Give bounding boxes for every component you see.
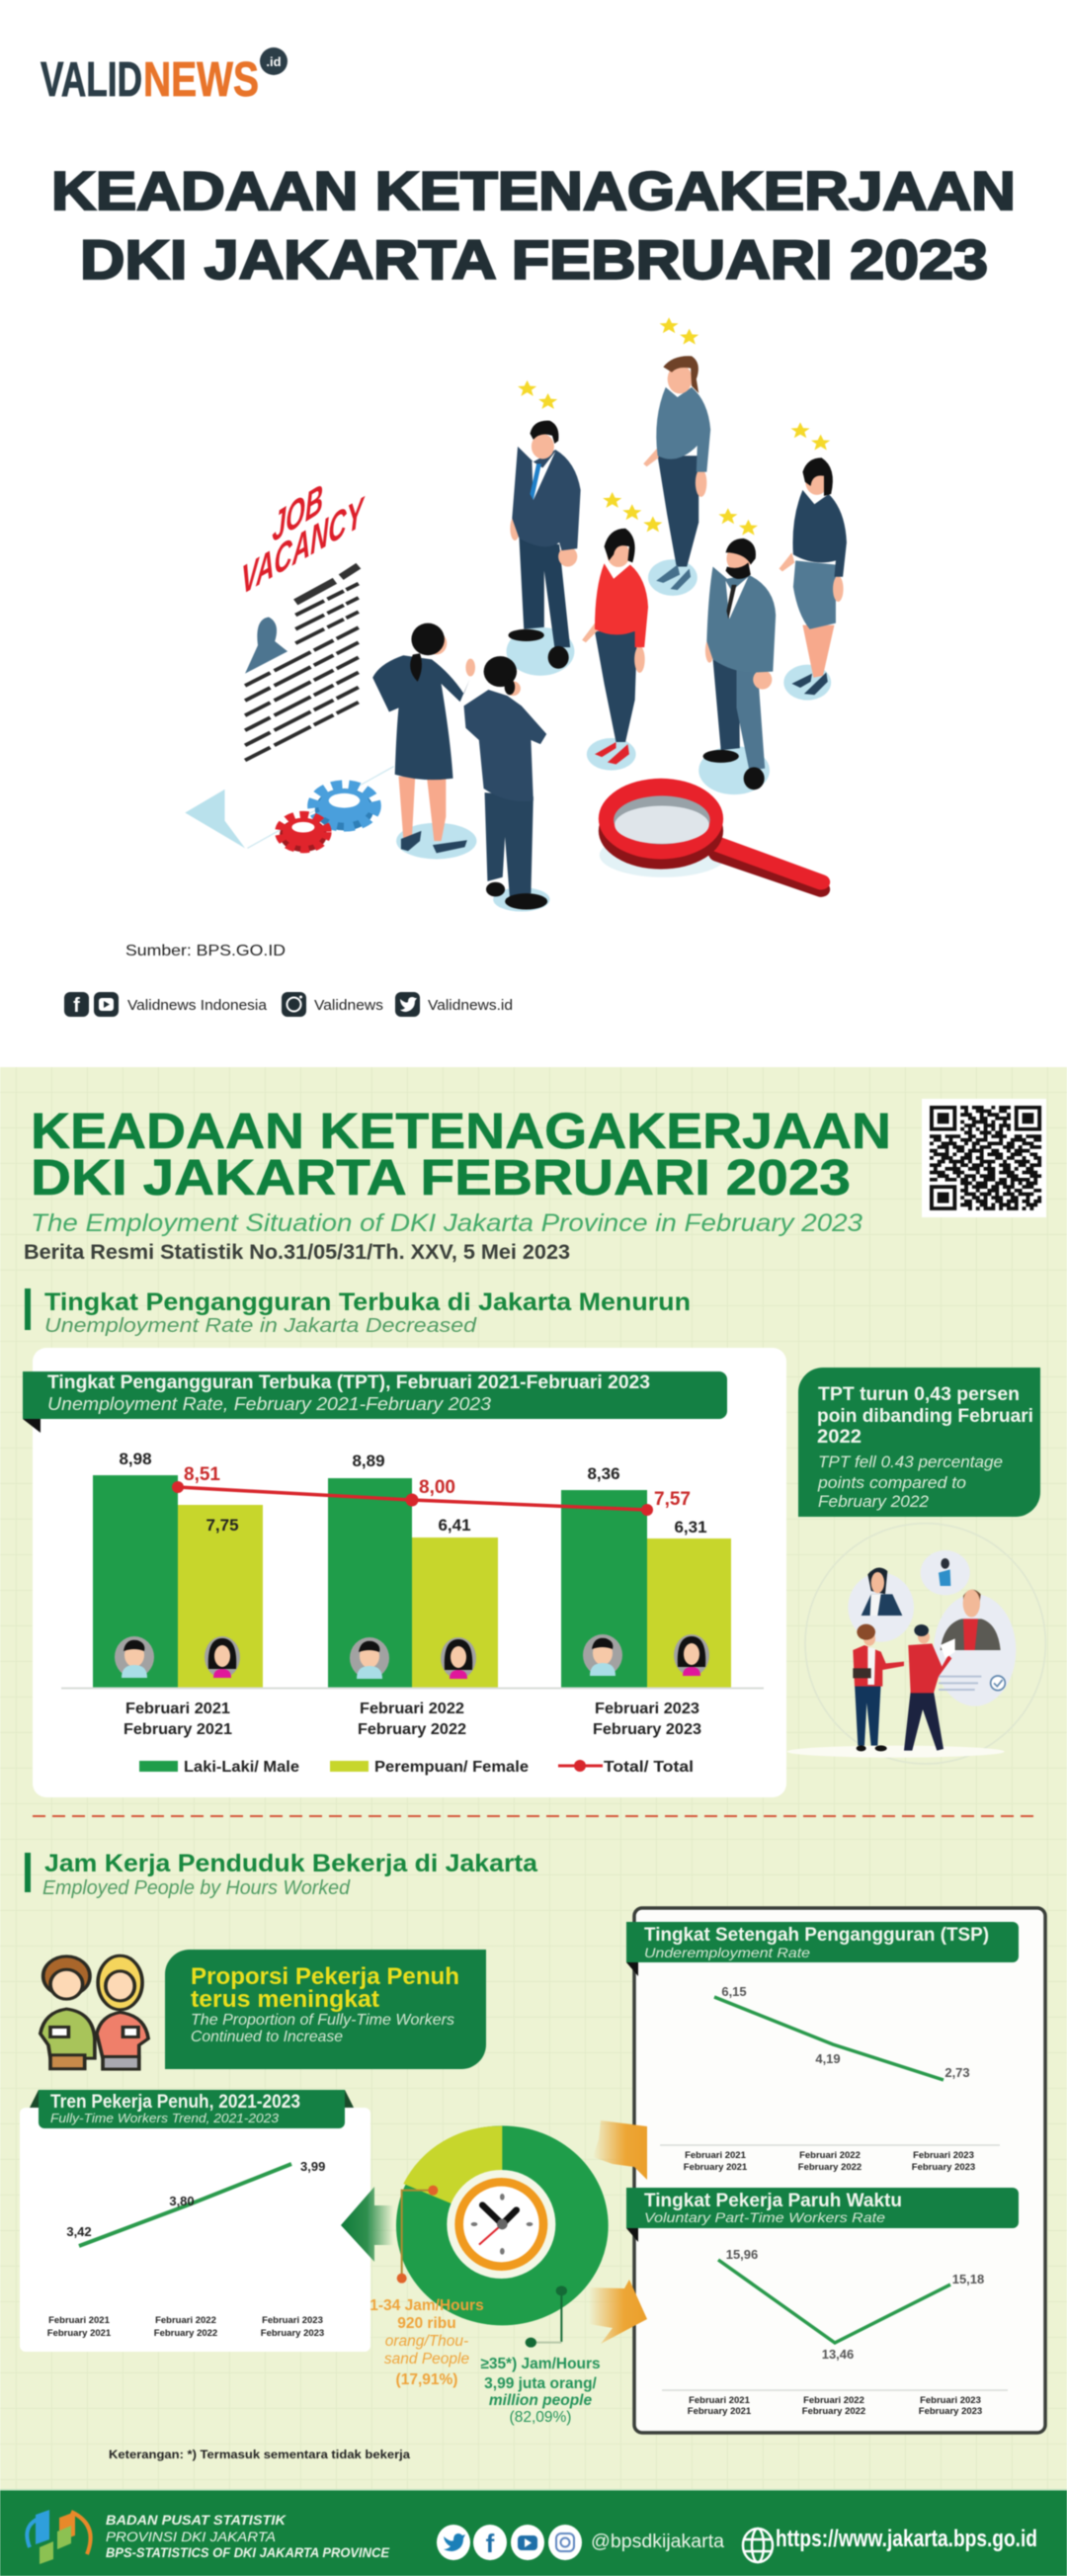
x axis labels: Februari 2021 xyxy=(48,2315,111,2326)
icon: QR code xyxy=(922,1099,1046,1217)
line chart: full-time workers xyxy=(66,2159,325,2246)
callout: TPT decrease: poin dibanding Februari xyxy=(817,1406,1033,1427)
leader: 35 hours and above xyxy=(526,2285,567,2348)
page background: white xyxy=(0,0,1067,1067)
label: 35 hours and above: (82,09%) xyxy=(510,2409,571,2426)
callout: proportion of full-time workers: The Proportion of Fully-Time Workers xyxy=(191,2012,454,2029)
callout: proportion of full-time workers: Continued to Increase xyxy=(191,2029,343,2045)
person: woman in navy dress xyxy=(372,623,476,859)
line chart: underemployment: February 2022 xyxy=(798,2162,862,2173)
person: woman in red jacket xyxy=(853,1624,904,1751)
x axis labels: Februari 2021 xyxy=(125,1701,230,1717)
bar value labels xyxy=(119,1450,707,1537)
x axis labels: Februari 2023 xyxy=(595,1701,699,1717)
legend: Perempuan/ Female xyxy=(374,1759,529,1776)
icon: twitter xyxy=(395,992,420,1017)
line chart: part-time: Februari 2022 xyxy=(803,2395,864,2406)
label: 1-34 hours: sand People xyxy=(384,2351,469,2368)
title xyxy=(51,160,1016,291)
x axis labels: Februari 2022 xyxy=(360,1701,464,1717)
arrow: to underemployment xyxy=(593,2120,647,2180)
callout: TPT decrease xyxy=(798,1368,1040,1517)
person: woman in navy top xyxy=(780,457,847,701)
label: 1-34 hours: (17,91%) xyxy=(396,2371,457,2388)
panel: underemployment and part-time xyxy=(626,1908,1045,2433)
candidate portrait: woman xyxy=(862,1568,902,1616)
chart: donut of hours worked with clock xyxy=(396,2125,609,2348)
callout: proportion of full-time workers: terus meningkat xyxy=(191,1986,379,2013)
footer agency name: PROVINSI DKI JAKARTA xyxy=(106,2529,276,2544)
x axis labels: February 2023 xyxy=(593,1721,701,1738)
line chart: part-time: Februari 2021 xyxy=(689,2395,751,2406)
title: DKI JAKARTA FEBRUARI 2023 xyxy=(80,228,988,291)
divider: red dashed line xyxy=(33,1815,1037,1817)
icon: instagram xyxy=(282,992,306,1017)
panel: BPS infographic background xyxy=(0,1067,1067,2490)
x axis labels: February 2021 xyxy=(123,1721,232,1738)
line chart: underemployment: Februari 2023 xyxy=(913,2150,974,2161)
heading: BPS title: DKI JAKARTA FEBRUARI 2023 xyxy=(31,1149,851,1205)
line chart: part-time: 15,96 xyxy=(726,2247,758,2262)
subtitle: English: The Employment Situation of DKI Jakarta Province in February 2023 xyxy=(31,1209,862,1237)
footnote: Keterangan: *) Termasuk sementara tidak bekerja xyxy=(109,2450,411,2461)
label: 35 hours and above: ≥35*) Jam/Hours xyxy=(480,2356,601,2372)
line: total rate: 8,00 xyxy=(419,1477,455,1498)
line chart: underemployment: 4,19 xyxy=(815,2051,841,2066)
footer agency name xyxy=(106,2512,390,2560)
section heading: unemployment xyxy=(25,1288,691,1337)
x axis labels: Februari 2023 xyxy=(262,2315,323,2326)
person: man in red shirt xyxy=(904,1624,955,1751)
line chart: underemployment: 6,15 xyxy=(721,1984,747,1999)
heading: BPS title xyxy=(31,1103,891,1205)
icon: youtube xyxy=(511,2525,544,2560)
callout: TPT decrease: February 2022 xyxy=(818,1492,930,1511)
banner: chart title xyxy=(23,1371,727,1433)
banner: trend title: Fully-Time Workers Trend, 2021-2023 xyxy=(50,2111,280,2125)
line chart: underemployment xyxy=(660,1984,1000,2173)
callout: TPT decrease: points compared to xyxy=(817,1473,966,1492)
banner: part-time xyxy=(626,2188,1019,2242)
source line: Sumber: BPS.GO.ID xyxy=(125,943,286,959)
icon: two workers xyxy=(41,1955,148,2069)
footer xyxy=(0,2489,1067,2576)
bar value labels: 8,98 xyxy=(119,1450,152,1468)
banner: underemployment xyxy=(626,1922,1019,1976)
legend: Total/ Total xyxy=(604,1759,694,1776)
icon: facebook: f xyxy=(73,995,80,1017)
line chart: part-time: February 2022 xyxy=(802,2406,865,2417)
social handle: @bpsdkijakarta xyxy=(591,2532,724,2552)
label: 1-34 hours: 920 ribu xyxy=(397,2315,456,2332)
x axis labels: February 2022 xyxy=(154,2328,217,2339)
x axis labels: February 2022 xyxy=(358,1721,466,1738)
footer agency name: BPS-STATISTICS OF DKI JAKARTA PROVINCE xyxy=(106,2544,390,2560)
person: bearded man with glasses xyxy=(698,539,776,794)
line chart: part-time xyxy=(662,2247,1008,2417)
leader: 1-34 hours xyxy=(397,2186,438,2284)
footer agency name: BADAN PUSAT STATISTIK xyxy=(106,2512,287,2528)
line chart: part-time: 13,46 xyxy=(822,2347,854,2362)
candidate portrait: small xyxy=(939,1558,950,1586)
icon: facebook xyxy=(64,992,89,1017)
bar value labels: 6,41 xyxy=(438,1516,471,1535)
callout: TPT decrease: 2022 xyxy=(817,1427,862,1448)
line chart: full-time workers: 3,42 xyxy=(66,2224,92,2239)
line chart: underemployment: February 2021 xyxy=(684,2162,748,2173)
label: 1-34 hours: orang/Thou- xyxy=(385,2333,468,2350)
x axis labels: February 2021 xyxy=(47,2328,112,2339)
line chart: part-time: February 2023 xyxy=(919,2406,982,2417)
icon: youtube xyxy=(94,992,119,1017)
legend: Laki-Laki/ Male xyxy=(184,1759,299,1776)
logo: Validnews.id: .id xyxy=(266,54,282,69)
legend xyxy=(139,1759,694,1776)
line chart: full-time workers: 3,80 xyxy=(169,2194,195,2208)
stars xyxy=(518,317,830,536)
bar value labels: 6,31 xyxy=(674,1518,707,1537)
panel: full-time workers trend xyxy=(20,2090,370,2352)
label: 35 hours and above: 3,99 juta orang/ xyxy=(484,2375,598,2392)
title: KEADAAN KETENAGAKERJAAN xyxy=(51,160,1016,221)
banner: underemployment: Underemployment Rate xyxy=(644,1945,810,1960)
panel: unemployment rate chart xyxy=(23,1348,786,1797)
line chart: part-time: February 2021 xyxy=(688,2406,752,2417)
line chart: full-time workers: 3,99 xyxy=(300,2159,325,2174)
social media row xyxy=(64,992,513,1017)
section heading: unemployment: Tingkat Pengangguran Terbuka di Jakarta Menurun xyxy=(44,1288,691,1316)
line: total rate: 7,57 xyxy=(654,1489,691,1510)
line: total rate: 8,51 xyxy=(184,1464,220,1485)
illustration: recruiters and candidates xyxy=(787,1524,1045,1764)
person: man seen from behind xyxy=(464,656,550,912)
bar value labels: 7,75 xyxy=(205,1516,239,1535)
icon: magnifying glass xyxy=(599,779,821,889)
arrow: to part-time xyxy=(589,2280,647,2344)
person: woman in red blouse xyxy=(582,529,648,771)
label: 1-34 hours: 1-34 Jam/Hours xyxy=(369,2297,484,2314)
social handle: Validnews: Validnews xyxy=(314,997,383,1014)
job vacancy poster: VACANCY xyxy=(241,488,366,604)
icon: facebook: f xyxy=(486,2529,495,2558)
callout: proportion of full-time workers: Proporsi Pekerja Penuh xyxy=(191,1963,459,1990)
icon: twitter xyxy=(437,2525,470,2560)
section heading: hours worked: Jam Kerja Penduduk Bekerja di Jakarta xyxy=(44,1850,538,1877)
section heading: hours worked xyxy=(25,1850,538,1899)
heading: BPS title: KEADAAN KETENAGAKERJAAN xyxy=(31,1103,891,1159)
gears xyxy=(280,785,375,852)
banner: part-time: Tingkat Pekerja Paruh Waktu xyxy=(644,2191,902,2211)
line chart: part-time: Februari 2023 xyxy=(920,2395,981,2406)
logo: Validnews.id xyxy=(41,47,287,107)
line chart: underemployment: February 2023 xyxy=(912,2162,975,2173)
candidate portrait: man xyxy=(939,1590,1005,1691)
icon: clock xyxy=(447,2170,555,2279)
line chart: underemployment: Februari 2022 xyxy=(799,2150,861,2161)
icon: globe xyxy=(743,2529,773,2562)
x axis labels: Februari 2022 xyxy=(155,2315,216,2326)
person: man with blue tie xyxy=(507,421,581,676)
bar chart xyxy=(61,1450,764,1738)
label: 35 hours and above: million people xyxy=(489,2392,592,2409)
illustration: job vacancy and job seekers xyxy=(185,317,847,912)
icon: instagram xyxy=(548,2525,582,2560)
bar value labels: 8,36 xyxy=(587,1464,620,1483)
banner: underemployment: Tingkat Setengah Pengangguran (TSP) xyxy=(644,1925,989,1946)
icons: male and female avatars xyxy=(115,1634,709,1679)
line chart: part-time: 15,18 xyxy=(952,2272,984,2286)
banner: trend title xyxy=(30,2090,354,2128)
section heading: unemployment: Unemployment Rate in Jakarta Decreased xyxy=(44,1315,477,1337)
social handle: Validnews.id: Validnews.id xyxy=(428,997,513,1014)
label: 1-34 hours xyxy=(369,2297,484,2388)
x axis labels xyxy=(123,1701,701,1738)
banner: chart title: Tingkat Pengangguran Terbuka (TPT), Februari 2021-Februari 2023 xyxy=(47,1372,650,1393)
label: 35 hours and above xyxy=(480,2356,601,2426)
banner: chart title: Unemployment Rate, February 2021-February 2023 xyxy=(47,1394,491,1414)
banner: part-time: Voluntary Part-Time Workers Rate xyxy=(644,2209,885,2225)
callout: TPT decrease: TPT fell 0.43 percentage xyxy=(818,1453,1003,1471)
section heading: hours worked: Employed People by Hours Worked xyxy=(42,1877,351,1899)
x axis labels xyxy=(47,2315,324,2339)
job vacancy poster: JOB xyxy=(272,474,323,551)
release reference line: Berita Resmi Statistik No.31/05/31/Th. XXV, 5 Mei 2023 xyxy=(24,1241,570,1264)
logo: BPS xyxy=(27,2510,91,2564)
logo: Validnews.id: NEWS xyxy=(143,53,259,107)
icon: facebook xyxy=(473,2525,507,2560)
arrow: toward full-time trend xyxy=(341,2187,393,2262)
callout: proportion of full-time workers xyxy=(165,1950,486,2069)
line chart: underemployment: 2,73 xyxy=(944,2065,970,2080)
x axis labels: February 2023 xyxy=(261,2328,324,2339)
line: total rate xyxy=(172,1464,691,1516)
line chart: underemployment: Februari 2021 xyxy=(685,2150,747,2161)
callout: TPT decrease: TPT turun 0,43 persen xyxy=(818,1384,1020,1405)
social handle: Validnews Indonesia: Validnews Indonesia xyxy=(127,997,268,1014)
bar value labels: 8,89 xyxy=(352,1452,385,1470)
banner: trend title: Tren Pekerja Penuh, 2021-2023 xyxy=(50,2092,300,2113)
logo: Validnews.id: VALID xyxy=(41,53,142,107)
job vacancy poster xyxy=(185,474,394,848)
person: woman in grey blouse xyxy=(643,356,710,596)
